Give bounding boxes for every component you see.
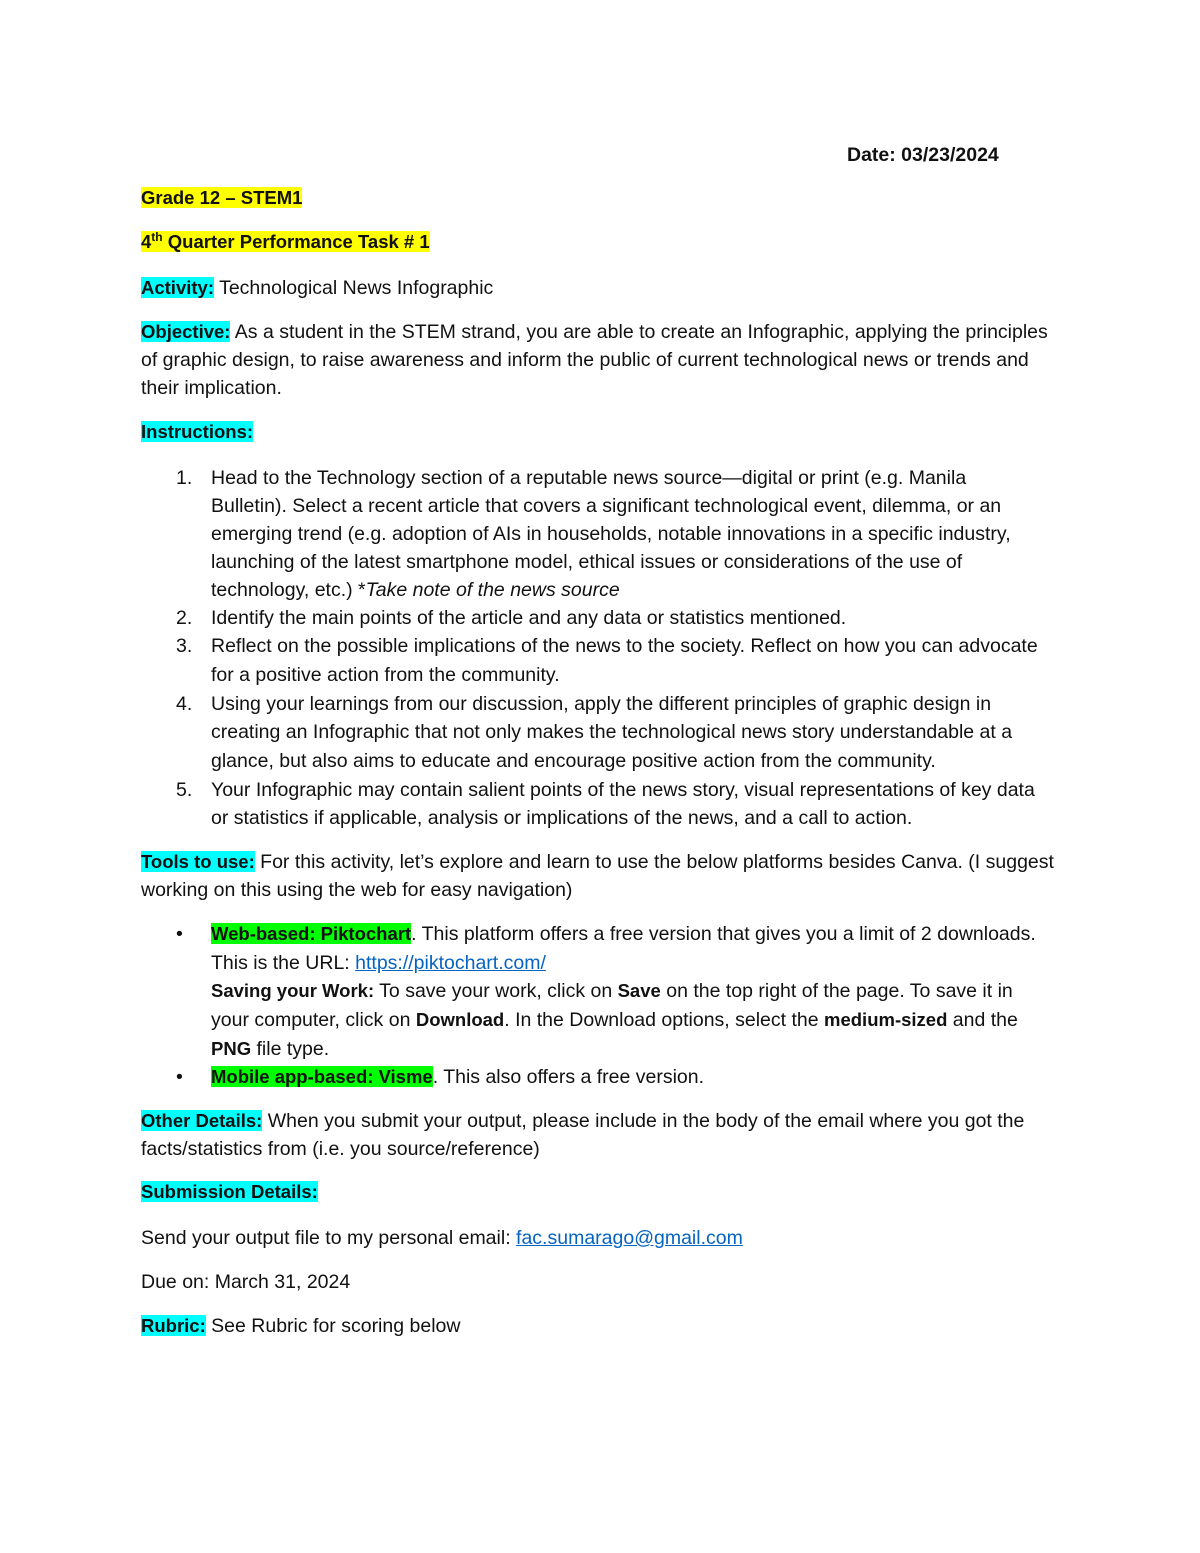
instructions list: glance, but also aims to educate and encourage positive action from the community.: [211, 750, 936, 772]
heading: performance task: 4th Quarter Performance Task # 1: [141, 230, 430, 252]
heading: instructions: Instructions:: [141, 421, 253, 442]
instructions list: creating an Infographic that not only makes the technological news story understandable at a: [211, 721, 1012, 743]
tools bullet list: Mobile app-based: Visme. This also offers a free version.: [211, 1066, 704, 1088]
instructions list: for a positive action from the community.: [211, 664, 560, 686]
instructions list: Reflect on the possible implications of the news to the society. Reflect on how you can advocate: [211, 635, 1038, 657]
tools to use: working on this using the web for easy navigation): [141, 879, 572, 901]
tools bullet list: PNG file type.: [211, 1038, 329, 1060]
tools bullet list: Saving your Work: To save your work, click on Save on the top right of the page. To save it in: [211, 980, 1013, 1002]
instructions list: [176, 467, 1038, 829]
due date: Due on: March 31, 2024: [141, 1271, 350, 1293]
other details: [141, 1110, 1024, 1160]
instructions list: Using your learnings from our discussion, apply the different principles of graphic design in: [211, 693, 991, 715]
tools bullet list: •: [176, 1066, 183, 1088]
instructions list: 4.: [176, 693, 192, 715]
tools to use: [141, 851, 1054, 901]
instructions list: technology, etc.) *Take note of the news source: [211, 579, 620, 601]
rubric: Rubric: See Rubric for scoring below: [141, 1315, 460, 1337]
objective: their implication.: [141, 377, 282, 399]
other details: facts/statistics from (i.e. you source/reference): [141, 1138, 540, 1160]
instructions list: Head to the Technology section of a reputable news source—digital or print (e.g. Manila: [211, 467, 966, 489]
tools bullet list: [176, 923, 1036, 1088]
instructions list: or statistics if applicable, analysis or implications of the news, and a call to action.: [211, 807, 912, 829]
objective: of graphic design, to raise awareness and inform the public of current technological news or trends and: [141, 349, 1029, 371]
instructions list: 3.: [176, 635, 192, 657]
instructions list: emerging trend (e.g. adoption of AIs in households, notable innovations in a specific industry,: [211, 523, 1011, 545]
tools to use: Tools to use: For this activity, let’s explore and learn to use the below platforms besides Canva. (I suggest: [141, 851, 1054, 873]
heading: grade: Grade 12 – STEM1: [141, 187, 302, 208]
instructions list: Your Infographic may contain salient points of the news story, visual representations of key data: [211, 779, 1035, 801]
tools bullet list: •: [176, 923, 183, 945]
tools bullet list: your computer, click on Download. In the Download options, select the medium-sized and the: [211, 1009, 1018, 1031]
instructions list: Bulletin). Select a recent article that covers a significant technological event, dilemma, or an: [211, 495, 1001, 517]
tools bullet list: Web-based: Piktochart. This platform offers a free version that gives you a limit of 2 downloads.: [211, 923, 1036, 945]
instructions list: launching of the latest smartphone model, ethical issues or considerations of the use of: [211, 551, 962, 573]
date: Date: 03/23/2024: [847, 144, 999, 166]
instructions list: 5.: [176, 779, 192, 801]
activity: Activity: Technological News Infographic: [141, 277, 493, 299]
other details: Other Details: When you submit your output, please include in the body of the email where you got the: [141, 1110, 1024, 1132]
objective: [141, 321, 1048, 399]
objective: Objective: As a student in the STEM strand, you are able to create an Infographic, applying the principles: [141, 321, 1048, 343]
tools bullet list: This is the URL: https://piktochart.com/: [211, 952, 546, 974]
instructions list: Identify the main points of the article and any data or statistics mentioned.: [211, 607, 846, 629]
instructions list: 2.: [176, 607, 192, 629]
heading: submission details: Submission Details:: [141, 1181, 318, 1202]
email: Send your output file to my personal email: fac.sumarago@gmail.com: [141, 1227, 743, 1249]
instructions list: 1.: [176, 467, 192, 489]
